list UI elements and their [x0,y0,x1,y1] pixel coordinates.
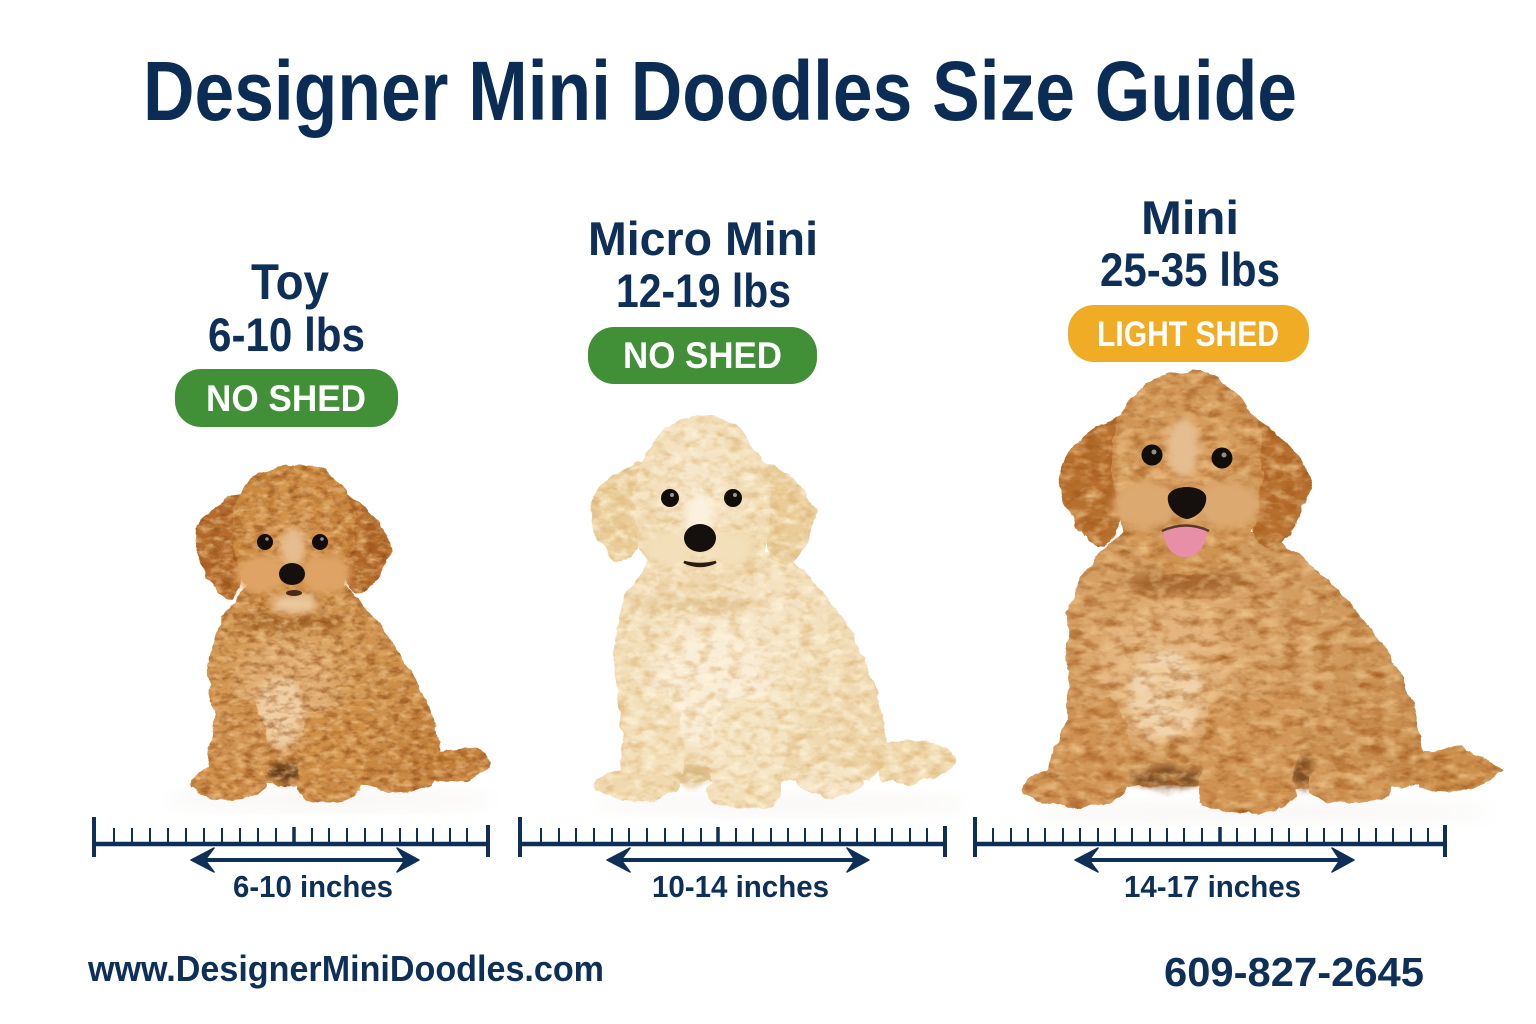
ruler: micro mini [520,817,945,857]
badge: light shed [1068,305,1309,362]
illustration: mini puppy [1023,372,1502,820]
weight: toy: 6-10 lbs [208,308,365,361]
weight: mini: 25-35 lbs [1100,243,1280,296]
illustration: micro mini puppy [590,415,970,812]
footer: phone: 609-827-2645 [1164,949,1424,995]
label: toy height: 6-10 inches [233,869,393,904]
panel: mini [975,191,1502,904]
heading: toy name: Toy [251,254,329,310]
badge: no shed: NO SHED [623,335,782,376]
footer: website: www.DesignerMiniDoodles.com [87,948,604,989]
label: micro mini height: 10-14 inches [652,869,829,904]
heading: mini name: Mini [1141,191,1239,244]
badge: no shed [175,369,398,427]
ruler: mini [975,817,1445,857]
title: Designer Mini Doodles Size Guide [143,44,1297,138]
panel: toy [94,254,495,904]
badge: light shed: LIGHT SHED [1097,315,1279,354]
panel: micro mini [520,212,970,904]
badge: no shed: NO SHED [206,378,366,419]
illustration: toy puppy [165,464,495,808]
badge: no shed [588,327,817,384]
heading: micro mini name: Micro Mini [588,212,818,265]
arrow: micro mini height span [607,848,869,872]
arrow: mini height span [1075,848,1354,872]
arrow: toy height span [191,848,419,872]
ruler: toy [94,817,488,857]
label: mini height: 14-17 inches [1124,869,1301,904]
weight: micro mini: 12-19 lbs [616,264,791,317]
